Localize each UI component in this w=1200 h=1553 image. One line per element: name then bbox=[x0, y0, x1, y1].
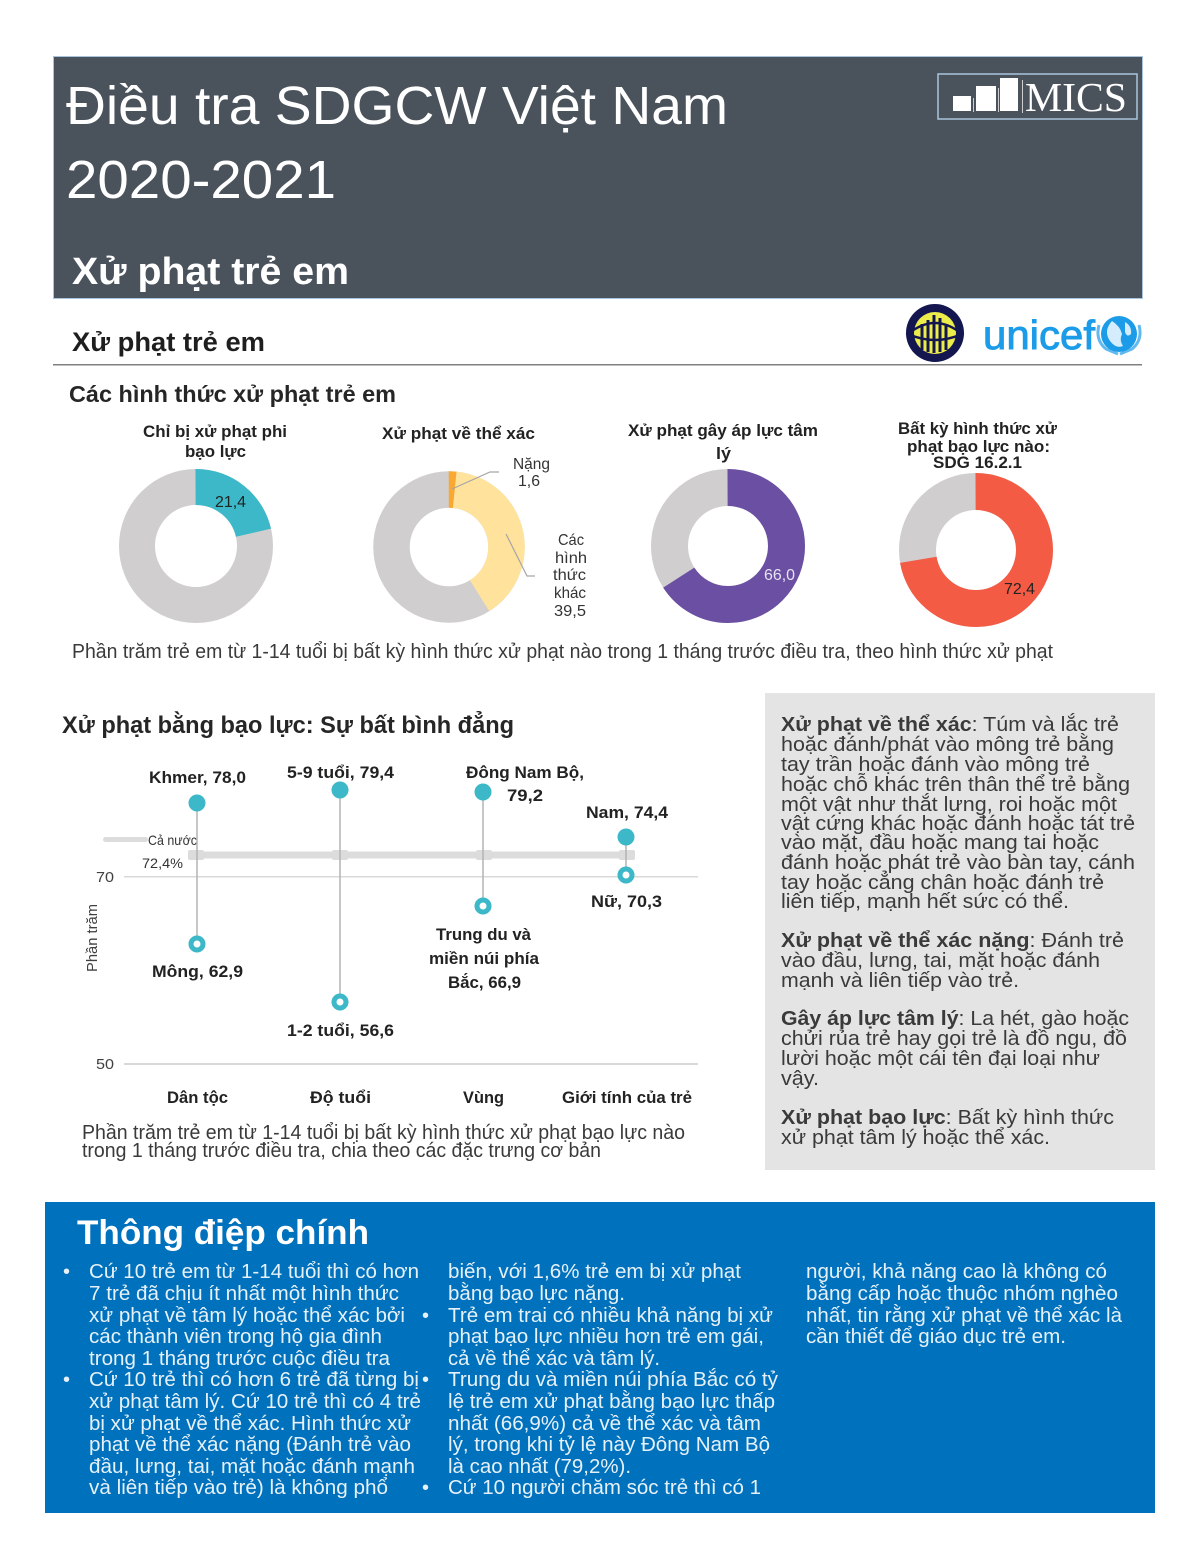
label: other forms: Các bbox=[558, 532, 584, 549]
national average line bbox=[103, 832, 635, 871]
definition: violent discipline: xử phạt tâm lý hoặc thể xác. bbox=[781, 1127, 1050, 1149]
definition: physical punishment: vào mặt, đầu hoặc mang tai hoặc bbox=[781, 832, 1099, 854]
donut chart: psychological aggression bbox=[628, 421, 818, 604]
range chart caption: trong 1 tháng trước điều tra, chia theo các đặc trưng cơ bản bbox=[82, 1140, 601, 1162]
column 2: là cao nhất (79,2%). bbox=[448, 1456, 631, 1478]
column 2: Trẻ em trai có nhiều khả năng bị xử bbox=[448, 1305, 773, 1327]
logo: MICS: MICS bbox=[1025, 74, 1127, 120]
definition: psychological aggression: vậy. bbox=[781, 1068, 819, 1090]
donut chart: any violent discipline: phạt bạo lực nào: bbox=[907, 437, 1050, 456]
donut chart: physical punishment: Xử phạt về thể xác bbox=[382, 424, 535, 443]
donut chart: any violent discipline: 72,4 bbox=[1004, 581, 1035, 598]
range: region bbox=[429, 763, 584, 992]
range: age bbox=[287, 763, 395, 1040]
label: other forms: 39,5 bbox=[554, 603, 586, 620]
y axis labels: 50 bbox=[96, 1056, 114, 1073]
label: other forms: thức bbox=[553, 567, 586, 584]
column 2: Cứ 10 người chăm sóc trẻ thì có 1 bbox=[448, 1477, 761, 1499]
column 1: xử phạt tâm lý. Cứ 10 trẻ thì có 4 trẻ bbox=[89, 1391, 421, 1413]
x axis labels bbox=[167, 1088, 692, 1107]
bullets: • bbox=[422, 1305, 429, 1327]
heading: forms of discipline: Các hình thức xử phạt trẻ em bbox=[69, 381, 396, 407]
column 1 bbox=[89, 1261, 421, 1499]
column 3: nhất, tin rằng xử phạt về thể xác là bbox=[806, 1304, 1123, 1327]
donut chart: psychological aggression: lý bbox=[716, 444, 732, 463]
logo: unicef: unicef bbox=[983, 312, 1096, 358]
column 2: cả về thể xác và tâm lý. bbox=[448, 1348, 660, 1370]
donut chart: any violent discipline: Bất kỳ hình thức xử bbox=[898, 419, 1058, 438]
label: other forms: khác bbox=[554, 585, 586, 602]
definition: psychological aggression: chửi rủa trẻ hay gọi trẻ là đồ ngu, đồ bbox=[781, 1028, 1127, 1050]
range: ethnicity: Khmer, 78,0 bbox=[149, 768, 246, 787]
y axis labels: 70 bbox=[96, 869, 114, 886]
column 3: cần thiết để giáo dục trẻ em. bbox=[806, 1326, 1066, 1348]
title: Điều tra SDGCW Việt Nam bbox=[66, 76, 728, 136]
bullets: • bbox=[63, 1369, 70, 1391]
definition: physical punishment: tay hoặc cẳng chân hoặc đánh trẻ bbox=[781, 870, 1104, 894]
banner subtitle: Xử phạt trẻ em bbox=[72, 251, 349, 293]
label: other forms bbox=[553, 532, 587, 620]
definition: physical punishment: đánh hoặc phát trẻ vào bàn tay, cánh bbox=[781, 852, 1135, 874]
donut chart: non-violent discipline bbox=[137, 422, 287, 605]
definition: physical punishment bbox=[781, 713, 1135, 913]
range: sex: Nam, 74,4 bbox=[586, 803, 669, 822]
bullets: • bbox=[422, 1369, 429, 1391]
x axis labels: Vùng bbox=[463, 1088, 504, 1107]
column 3: bằng cấp hoặc thuộc nhóm nghèo bbox=[806, 1282, 1118, 1305]
range: age: 1-2 tuổi, 56,6 bbox=[287, 1021, 394, 1040]
donut chart: any violent discipline bbox=[898, 419, 1058, 608]
column 2 bbox=[448, 1261, 778, 1499]
range: region: Bắc, 66,9 bbox=[448, 973, 521, 992]
x axis labels: Giới tính của trẻ bbox=[562, 1088, 692, 1107]
donut chart: non-violent discipline: bạo lực bbox=[185, 442, 246, 461]
label: severe: 1,6 bbox=[518, 473, 540, 490]
x axis labels: Độ tuổi bbox=[310, 1088, 371, 1107]
range: ethnicity: Mông, 62,9 bbox=[152, 962, 243, 981]
national average line: Cả nước bbox=[148, 832, 197, 848]
definition: violent discipline: Xử phạt bạo lực : Bất kỳ hình thức bbox=[781, 1107, 1114, 1129]
column 2: nhất (66,9%) cả về thể xác và tâm bbox=[448, 1413, 761, 1435]
column 1: xử phạt về tâm lý hoặc thể xác bởi bbox=[89, 1305, 405, 1327]
definition: severe physical punishment bbox=[781, 930, 1124, 992]
definition: physical punishment: tay trần hoặc đánh vào mông trẻ bbox=[781, 754, 1090, 776]
donut chart: non-violent discipline: 21,4 bbox=[215, 494, 246, 511]
column 3: người, khả năng cao là không có bbox=[806, 1261, 1107, 1283]
column 1: 7 trẻ đã chịu ít nhất một hình thức bbox=[89, 1283, 399, 1305]
donut chart: psychological aggression: Xử phạt gây áp lực tâm bbox=[628, 421, 818, 440]
bullets: • bbox=[63, 1261, 70, 1283]
definition: severe physical punishment: mạnh và liên tiếp vào trẻ. bbox=[781, 970, 1019, 992]
label: severe bbox=[513, 456, 550, 490]
donut chart: psychological aggression: 66,0 bbox=[764, 567, 795, 584]
column 2: bằng bạo lực nặng. bbox=[448, 1282, 625, 1305]
key messages heading: Thông điệp chính bbox=[77, 1214, 369, 1252]
bullets: • bbox=[422, 1477, 429, 1499]
column 3 bbox=[806, 1261, 1123, 1348]
range chart caption bbox=[82, 1122, 685, 1162]
range: region: miền núi phía bbox=[429, 949, 540, 968]
title bbox=[66, 76, 728, 210]
donut chart: non-violent discipline: Chỉ bị xử phạt phi bbox=[143, 422, 287, 441]
column 2: phạt bạo lực nhiều hơn trẻ em gái, bbox=[448, 1326, 764, 1348]
column 1: bị xử phạt về thể xác. Hình thức xử bbox=[89, 1413, 411, 1435]
column 1: các thành viên trong hộ gia đình bbox=[89, 1326, 382, 1348]
definition: psychological aggression bbox=[781, 1008, 1129, 1090]
definition: psychological aggression: lười hoặc một cái tên đại loại như bbox=[781, 1048, 1100, 1070]
section heading: Xử phạt trẻ em bbox=[72, 327, 265, 357]
column 1: phạt về thể xác nặng (Đánh trẻ vào bbox=[89, 1434, 411, 1456]
definition: physical punishment: liên tiếp, mạnh hết sức có thể. bbox=[781, 891, 1069, 913]
range: ethnicity bbox=[149, 768, 246, 981]
donut caption: Phần trăm trẻ em từ 1-14 tuổi bị bất kỳ hình thức xử phạt nào trong 1 tháng trước điều tra, theo hình thức xử phạt bbox=[72, 641, 1053, 663]
range chart bbox=[84, 763, 698, 1107]
range: age: 5-9 tuổi, 79,4 bbox=[287, 763, 395, 782]
definition: severe physical punishment: vào đầu, lưng, tai, mặt hoặc đánh bbox=[781, 950, 1100, 972]
column 1: và liên tiếp vào trẻ) là không phổ bbox=[89, 1477, 388, 1499]
range: region: Trung du và bbox=[436, 925, 532, 944]
column 2: lý, trong khi tỷ lệ này Đông Nam Bộ bbox=[448, 1434, 770, 1456]
title: 2020-2021 bbox=[66, 150, 336, 210]
label: severe: Nặng bbox=[513, 456, 550, 473]
donut chart: physical punishment bbox=[382, 424, 587, 620]
definition: physical punishment: Xử phạt về thể xác : Túm và lắc trẻ bbox=[781, 713, 1119, 736]
column 2: lệ trẻ em xử phạt bằng bạo lực thấp bbox=[448, 1390, 775, 1413]
panel: key messages bbox=[45, 1202, 1155, 1513]
definition: physical punishment: một vật như thắt lưng, roi hoặc một bbox=[781, 793, 1117, 816]
column 1: Cứ 10 trẻ thì có hơn 6 trẻ đã từng bị bbox=[89, 1369, 419, 1391]
range: region: 79,2 bbox=[507, 786, 543, 805]
heading: inequality: Xử phạt bằng bạo lực: Sự bất bình đẳng bbox=[62, 710, 514, 739]
range: sex bbox=[586, 803, 669, 911]
range: region: Đông Nam Bộ, bbox=[466, 763, 584, 782]
range chart caption: Phần trăm trẻ em từ 1-14 tuổi bị bất kỳ hình thức xử phạt bạo lực nào bbox=[82, 1122, 685, 1144]
panel: definitions bbox=[765, 693, 1155, 1170]
definition: violent discipline bbox=[781, 1107, 1114, 1149]
donut chart: any violent discipline: SDG 16.2.1 bbox=[933, 453, 1022, 472]
definition: physical punishment: hoặc đánh/phát vào mông trẻ bằng bbox=[781, 733, 1114, 756]
range: sex: Nữ, 70,3 bbox=[591, 892, 662, 911]
y axis labels bbox=[84, 869, 114, 1073]
column 2: Trung du và miền núi phía Bắc có tỷ bbox=[448, 1368, 778, 1391]
column 1: đầu, lưng, tai, mặt hoặc đánh mạnh bbox=[89, 1456, 415, 1478]
definition: physical punishment: hoặc chỗ khác trên thân thể trẻ bằng bbox=[781, 773, 1130, 796]
definition: physical punishment: vật cứng khác hoặc đánh hoặc tát trẻ bbox=[781, 813, 1135, 835]
header banner bbox=[54, 56, 1142, 298]
column 1: Cứ 10 trẻ em từ 1-14 tuổi thì có hơn bbox=[89, 1261, 419, 1283]
logo: unicef bbox=[983, 312, 1140, 358]
national average line: 72,4% bbox=[142, 855, 183, 871]
bullets bbox=[63, 1261, 429, 1499]
logo: statistics office seal bbox=[906, 304, 964, 362]
x axis labels: Dân tộc bbox=[167, 1088, 228, 1107]
logo: MICS bbox=[938, 74, 1137, 120]
definition: severe physical punishment: Xử phạt về thể xác nặng : Đánh trẻ bbox=[781, 930, 1124, 952]
y axis labels: Phần trăm bbox=[84, 904, 101, 972]
label: other forms: hình bbox=[555, 550, 587, 567]
column 2: biến, với 1,6% trẻ em bị xử phạt bbox=[448, 1261, 741, 1283]
definition: psychological aggression: Gây áp lực tâm lý : La hét, gào hoặc bbox=[781, 1008, 1129, 1030]
column 1: trong 1 tháng trước cuộc điều tra bbox=[89, 1348, 391, 1370]
